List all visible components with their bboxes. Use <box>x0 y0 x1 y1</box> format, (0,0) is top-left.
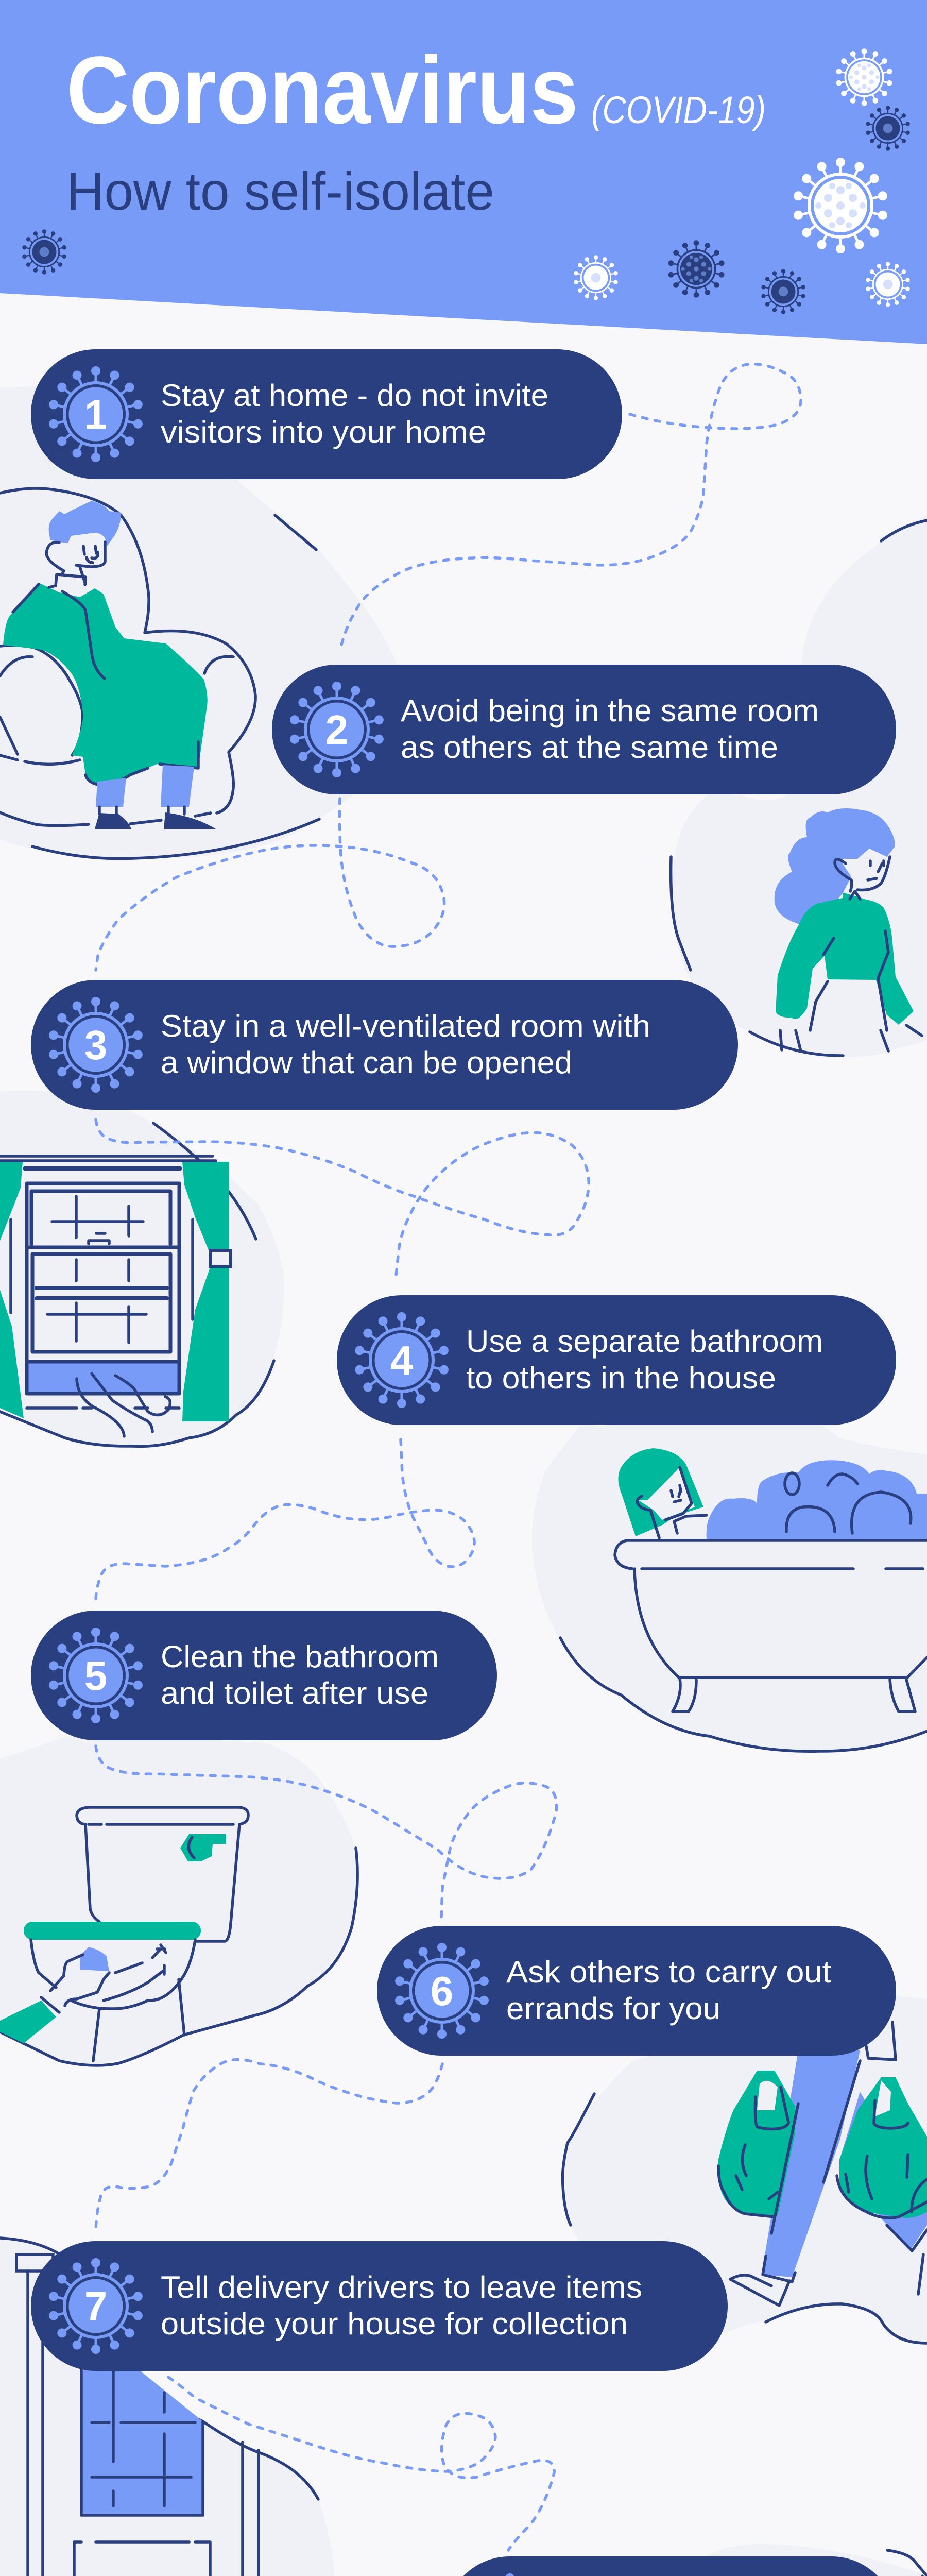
illustration: cleaning the toilet <box>0 1733 358 2066</box>
letterbox <box>74 2542 210 2576</box>
step 7 text: Tell delivery drivers to leave items <box>161 2270 642 2304</box>
seat <box>24 1922 201 1940</box>
step 8 badge <box>462 2573 558 2576</box>
step 2 badge <box>289 682 385 777</box>
step 4 pill <box>337 1295 896 1425</box>
hair <box>49 501 121 546</box>
header banner <box>0 0 927 344</box>
step 7 pill <box>31 2241 728 2371</box>
step 3 pill <box>31 980 738 1110</box>
step 1 badge <box>48 366 144 462</box>
hair <box>618 1448 703 1536</box>
step 4 text: to others in the house <box>466 1361 776 1395</box>
step 5 text: and toilet after use <box>161 1676 428 1710</box>
step 2 badge: 2 <box>325 707 348 753</box>
bag and leg lines <box>718 2061 927 2306</box>
shoes <box>95 812 216 829</box>
face <box>46 542 105 587</box>
first leg <box>762 2050 860 2277</box>
icon: dark virus left <box>22 229 67 275</box>
dashed path 1 <box>340 364 801 652</box>
face <box>637 1467 707 1538</box>
step 6 pill <box>377 1926 896 2056</box>
bowl <box>31 1940 195 2061</box>
step 5 text: Clean the bathroom <box>161 1639 439 1674</box>
step 3 text: Stay in a well-ventilated room with <box>161 1009 650 1043</box>
sweater <box>776 892 914 1025</box>
illustration: person carrying shopping bags <box>562 1994 927 2343</box>
icon: dark virus bottom <box>761 269 806 314</box>
illustration: open window with curtains <box>0 1091 284 1446</box>
step 6 badge <box>394 1943 490 2039</box>
step 5 badge <box>48 1628 144 1723</box>
bath tub <box>615 1540 927 1711</box>
dashed path 2 <box>96 799 444 970</box>
step 3 badge: 3 <box>84 1022 107 1068</box>
icon: dark virus top right <box>865 106 911 151</box>
legs <box>96 765 194 807</box>
air waves <box>77 1374 170 1436</box>
curtains <box>0 1162 229 1421</box>
illustration: dog on a lead <box>566 2544 927 2576</box>
step 6 text: Ask others to carry out <box>506 1955 831 1989</box>
icon: small white virus <box>573 255 619 300</box>
step 5 pill <box>31 1611 497 1740</box>
arm <box>0 2001 56 2043</box>
blanket <box>3 583 208 785</box>
second leg <box>840 2092 927 2250</box>
step 2 text: as others at the same time <box>401 730 778 765</box>
left bag <box>717 2071 795 2215</box>
step 7 text: outside your house for collection <box>161 2307 628 2341</box>
window frame <box>27 1363 179 1394</box>
step 1 text: Stay at home - do not invite <box>161 378 548 413</box>
illustration: man in armchair with blanket <box>0 387 408 859</box>
step 8 pill <box>445 2556 896 2576</box>
subtitle: How to self-isolate <box>66 162 494 222</box>
sponge <box>80 1947 109 1971</box>
step 4 text: Use a separate bathroom <box>466 1324 823 1359</box>
icon: medium dark virus <box>667 240 725 298</box>
step 7 badge: 7 <box>84 2283 107 2329</box>
icon: large white virus <box>793 158 888 253</box>
title: Coronavirus <box>66 37 578 144</box>
step 2 text: Avoid being in the same room <box>401 693 819 728</box>
step 7 badge <box>48 2258 144 2354</box>
step 3 text: a window that can be opened <box>161 1045 572 1080</box>
step 3 badge <box>48 997 144 1093</box>
hand <box>41 1955 109 2012</box>
hair <box>775 808 895 927</box>
step 4 badge: 4 <box>390 1337 414 1383</box>
title suffix: (COVID-19) <box>591 89 766 131</box>
illustration: parcel left at front door <box>0 2238 334 2576</box>
dashed path 3 <box>96 1120 589 1275</box>
step 1 text: visitors into your home <box>161 415 486 449</box>
icon: small white virus right <box>865 262 911 307</box>
curtain tieback <box>210 1250 231 1266</box>
flush lever <box>180 1834 226 1861</box>
door top rail <box>16 2255 53 2271</box>
cistern <box>77 1807 248 1941</box>
dashed path 6 <box>96 2060 442 2233</box>
step 1 pill <box>31 349 622 479</box>
illustration: woman standing alone <box>671 515 927 1057</box>
illustration: woman in bath <box>532 1417 927 1752</box>
foam <box>707 1460 927 1540</box>
icon: medium white virus <box>835 48 893 106</box>
foam bubbles <box>785 1473 911 1533</box>
dashed path 7 <box>168 2377 554 2550</box>
curtain rod <box>0 1156 216 1161</box>
step 4 badge <box>354 1312 450 1408</box>
dashed path 4 <box>96 1439 474 1601</box>
step 6 text: errands for you <box>506 1991 720 2026</box>
door window <box>81 2370 203 2515</box>
step 1 badge: 1 <box>84 392 107 437</box>
step 2 pill <box>272 665 896 794</box>
step 5 badge: 5 <box>84 1653 107 1699</box>
step 6 badge: 6 <box>431 1968 453 2014</box>
dashed path 5 <box>96 1746 557 1917</box>
sparkles <box>104 1945 166 2001</box>
door frame <box>28 2271 259 2576</box>
right bag <box>839 2077 927 2218</box>
